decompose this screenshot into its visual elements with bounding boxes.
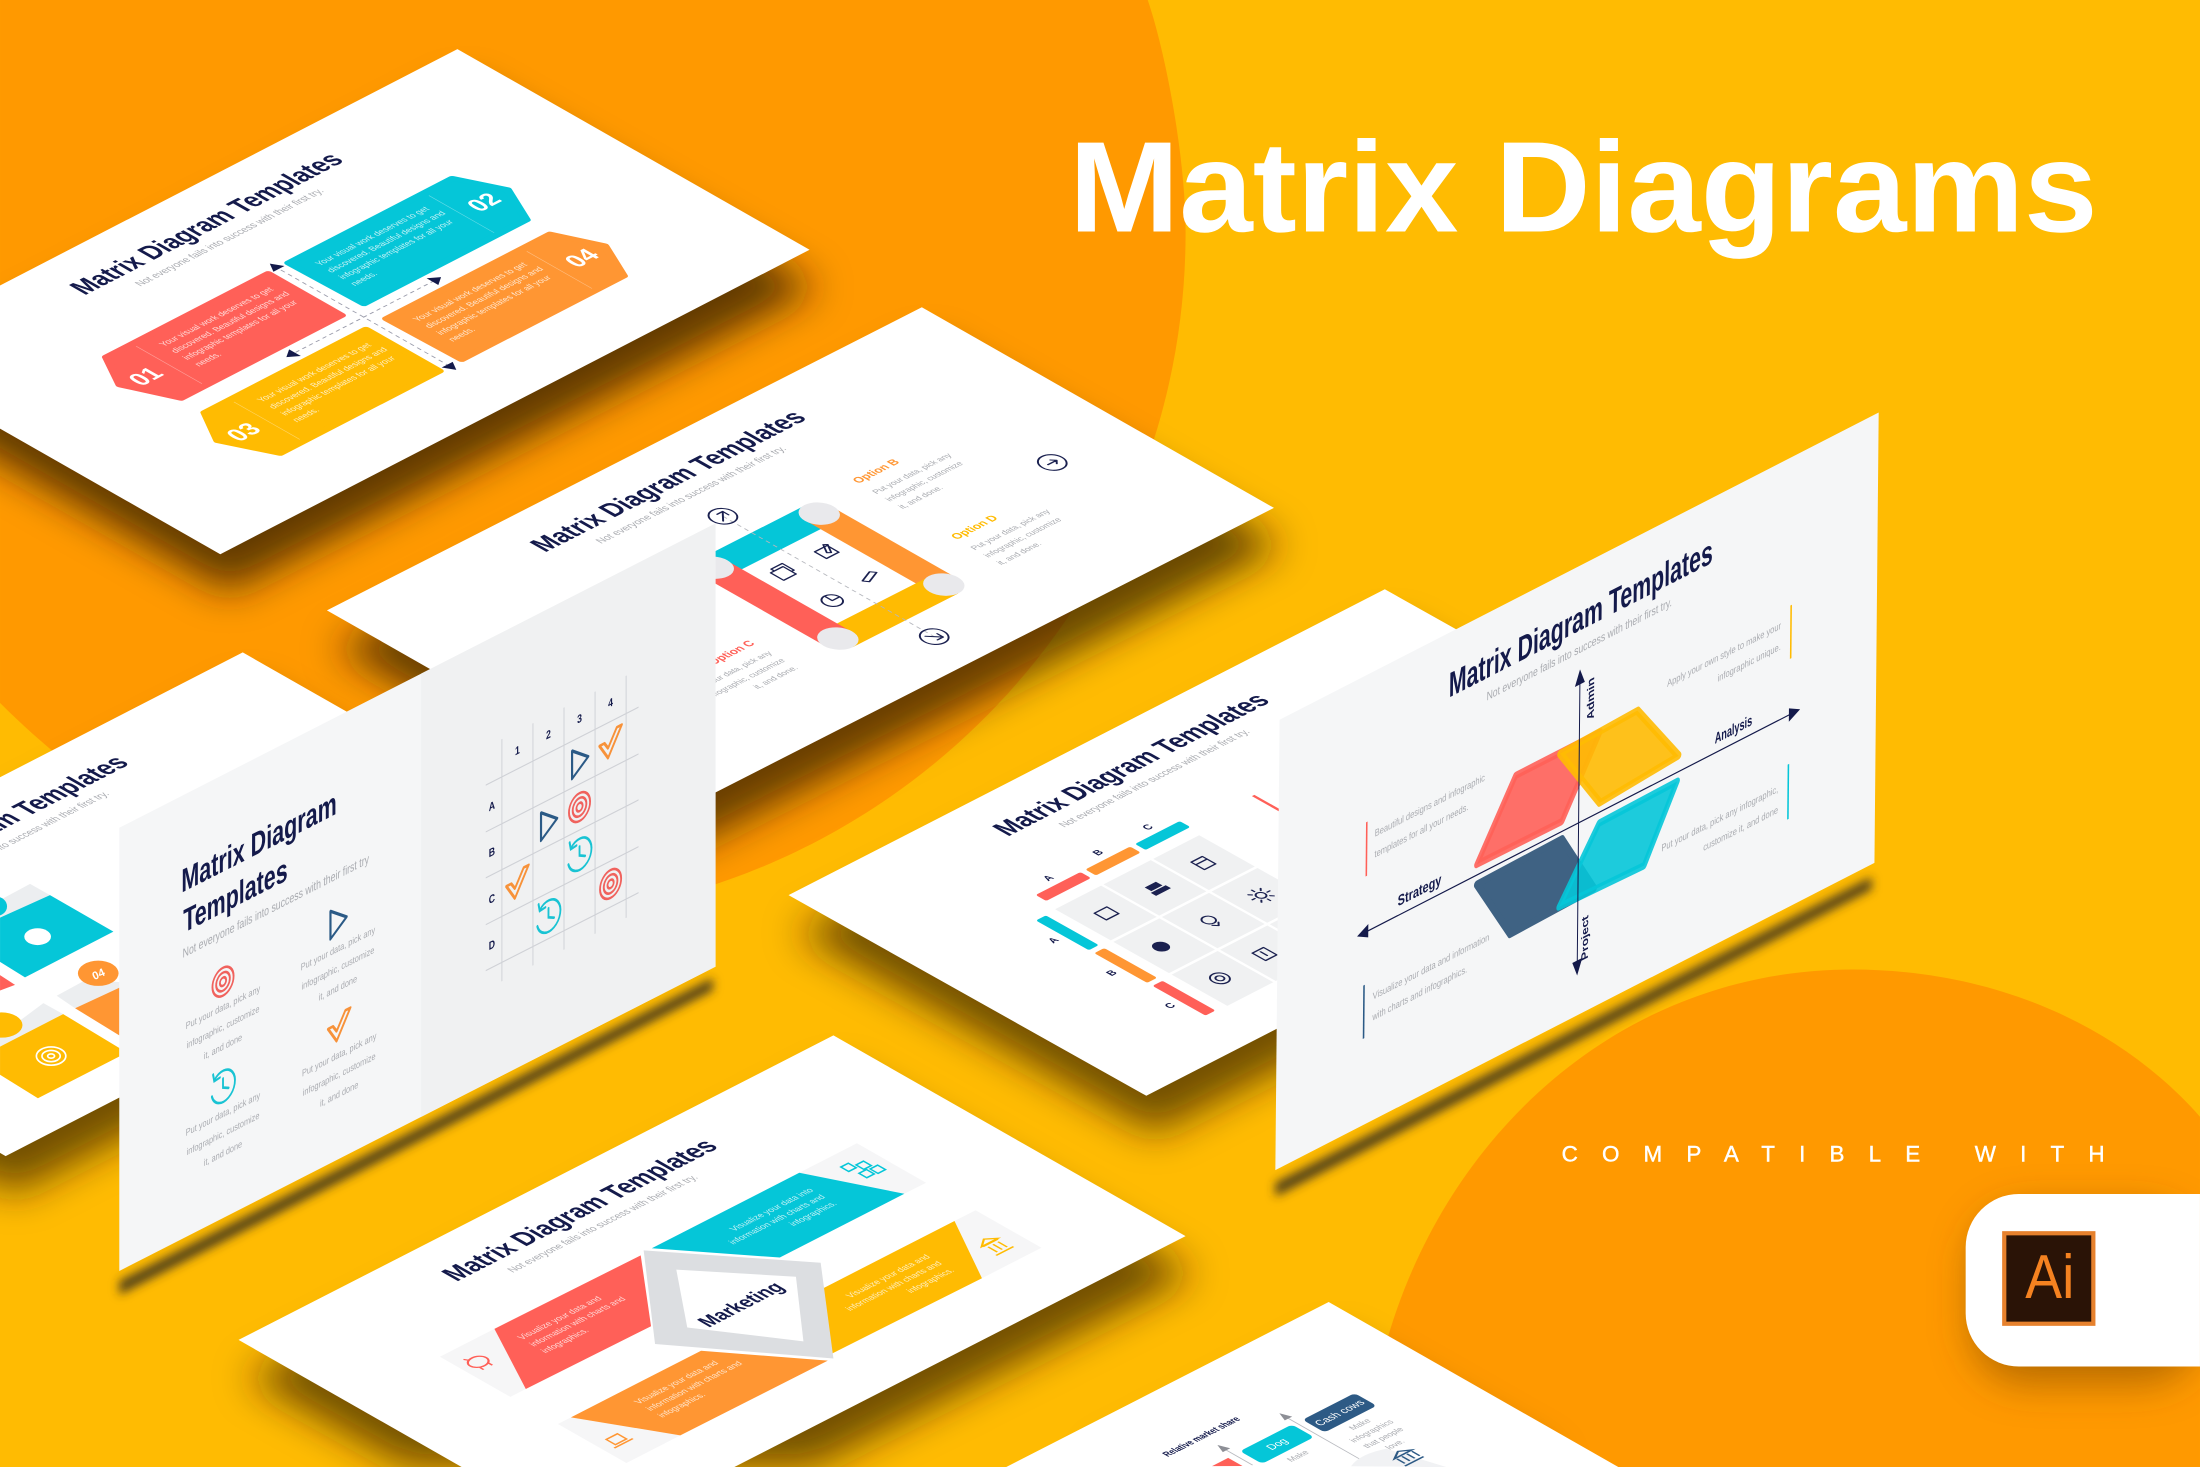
slide: numbered tags (0, 49, 810, 554)
side header bars: A (1046, 936, 1063, 945)
teal segment: infographics. (787, 1200, 839, 1227)
cell with bank icon (1348, 1439, 1447, 1467)
tag 03: needs. (290, 406, 322, 424)
side note marker (1253, 796, 1290, 816)
feature: triangle: it, and done (319, 973, 357, 1003)
background circle: top left (0, 0, 1186, 919)
panel shadow: left panel (119, 978, 713, 1295)
teal segment: information with charts and (726, 1193, 828, 1246)
red segment: infographics. (538, 1327, 591, 1354)
teal segment: Visualize your data into (727, 1187, 816, 1232)
slide shadow: marketing (247, 1073, 1194, 1467)
quadrant: teal (1559, 781, 1677, 909)
note: top left: Beautiful designs and infographic (1375, 772, 1485, 839)
arrow badges (703, 391, 1178, 648)
left slide quadrants: 04 (91, 966, 108, 983)
note: lower right: Put your data, pick any infographic, (1661, 783, 1778, 854)
tag 01: Your visual work deserves to get (157, 286, 276, 348)
feature: triangle: Put your data, pick any (301, 924, 376, 973)
grid cells (1055, 835, 1371, 1006)
grid matrix (486, 669, 639, 990)
tag 04: needs. (446, 326, 478, 343)
axis label: Relative market share (1161, 1415, 1244, 1459)
panel title: Matrix Diagram Templates (1449, 531, 1713, 705)
panel shadow: right panel (1275, 877, 1872, 1197)
note: top left (1366, 761, 1485, 876)
tag 01 (88, 274, 342, 408)
tag 02: 02 (461, 190, 508, 216)
yellow segment (766, 1210, 1041, 1355)
badge: Cash cows (1303, 1393, 1377, 1432)
text: Cash cows: Make (1346, 1417, 1373, 1431)
panel title: Templates (183, 851, 288, 941)
option B: Option B (850, 458, 903, 485)
quadrant: yellow (1559, 689, 1679, 824)
option B (850, 440, 981, 510)
panel: standing grid (119, 523, 716, 1271)
top header bars: A (1041, 874, 1058, 883)
side header bars (1023, 915, 1215, 1022)
option C: Put your data, pick any (690, 649, 775, 693)
slide: left partial (0, 652, 595, 1156)
option D: infographic, customize (981, 516, 1064, 559)
slide shadow: ring (335, 345, 1282, 849)
option B: infographic, customize (883, 460, 966, 503)
tag 04: Your visual work deserves to get (410, 261, 530, 323)
top header bars: B (1091, 849, 1107, 857)
title: Matrix Diagrams (1069, 115, 2098, 259)
tag 03: infographic templates for all your (278, 354, 398, 417)
badge shadow (1971, 1209, 2200, 1383)
slide shadow: growth share (1089, 1340, 1560, 1467)
badge: red (1212, 1458, 1243, 1467)
option D: it, and done. (994, 540, 1044, 566)
text: Cash cows (1335, 1411, 1420, 1457)
tag 01: discovered. Beautiful designs and (168, 290, 292, 354)
orange segment: information with charts and (643, 1360, 745, 1412)
option C: Option C (706, 639, 759, 667)
slide title: Matrix Diagram Templates (523, 406, 813, 556)
tag 01: needs. (192, 351, 224, 368)
grid matrix: 4 (608, 696, 613, 711)
slide title: Matrix Diagram Templates (62, 148, 350, 299)
text: Dog: Make (1284, 1449, 1312, 1463)
axes (1356, 556, 1802, 1089)
orange segment: infographics. (655, 1391, 708, 1419)
red segment: information with charts and (527, 1295, 628, 1348)
panel title: Matrix Diagram (181, 785, 337, 900)
feature: clock (186, 1050, 261, 1178)
note: lower left: Visualize your data and information (1373, 931, 1489, 1002)
text: Cash cows: love. (1383, 1438, 1407, 1451)
option B: Put your data, pick any (870, 451, 955, 495)
tag 03: 03 (220, 419, 268, 445)
grid icons (1091, 855, 1335, 986)
option C: infographic, customize (704, 657, 788, 700)
dashed cross arrows (192, 224, 534, 410)
slide subtitle: Not everyone fails into success with their first try. (133, 187, 327, 288)
tag 01: 01 (123, 364, 170, 390)
axis labels: Admin (1585, 675, 1597, 723)
yellow segment: Visualize your data and (843, 1253, 933, 1299)
note: top left: templates for all your needs. (1375, 801, 1469, 860)
icon: Ai logo (2004, 1233, 2093, 1324)
feature: check: Put your data, pick any (302, 1030, 377, 1079)
tag 04: 04 (559, 245, 607, 271)
red segment: Visualize your data and (515, 1295, 604, 1341)
option D: Option D (949, 514, 1001, 541)
grid matrix: 1 (515, 743, 520, 759)
text: Cash cows: that people (1360, 1426, 1406, 1450)
tag 04 (387, 225, 641, 360)
arrows (1214, 1411, 1374, 1467)
grid matrix: D (489, 937, 495, 953)
slide shadow: diagram 01-04 (0, 87, 818, 592)
feature: check: infographic, customize (303, 1050, 376, 1098)
icon: Ai logo: Ai (2025, 1243, 2074, 1312)
teal segment (652, 1143, 926, 1288)
tag 03 (186, 329, 439, 464)
feature: target (186, 949, 261, 1071)
top header bars: C (1140, 823, 1157, 832)
quadrant: navy (1476, 822, 1595, 952)
badge: Adobe Illustrator (1966, 1194, 2200, 1367)
option C (672, 639, 801, 708)
feature: clock: Put your data, pick any (186, 1089, 261, 1138)
feature: triangle: infographic, customize (302, 944, 374, 992)
tag 02: Your visual work deserves to get (313, 205, 432, 267)
top header bars (1022, 813, 1190, 901)
panel: standing quadrant chart (1275, 413, 1879, 1170)
panel title (181, 785, 337, 942)
feature: target: infographic, customize (187, 1003, 259, 1051)
center frame (563, 1208, 915, 1400)
text: Cash cows: infographics (1347, 1418, 1397, 1444)
note: top right: infographic unique. (1718, 641, 1781, 684)
feature: target: it, and done (204, 1031, 242, 1062)
slide subtitle: Not everyone fails into success with their first try. (594, 445, 790, 545)
note: top right: Apply your own style to make your (1667, 620, 1781, 689)
feature: check: it, and done (320, 1079, 358, 1109)
option D (949, 497, 1079, 566)
yellow segment: infographics. (904, 1267, 957, 1294)
feature: clock: infographic, customize (187, 1110, 259, 1158)
badge: Cash cows: Cash cows (1312, 1398, 1369, 1428)
orange segment (558, 1321, 828, 1463)
slide: options ring (327, 307, 1274, 811)
background circle: bottom right (1365, 969, 2200, 1467)
ring diagram (656, 482, 1002, 671)
badge: Dog (1240, 1424, 1314, 1464)
red segment (440, 1255, 711, 1398)
slide subtitle: Not everyone fails into success with their first try. (1056, 728, 1253, 829)
slide: growth share matrix (1006, 1302, 1618, 1467)
panel subtitle: Not everyone fails into success with their first try (183, 851, 369, 961)
left slide quadrants (0, 884, 119, 1098)
tag 03: Your visual work deserves to get (255, 341, 374, 403)
feature: target: Put your data, pick any (186, 983, 261, 1032)
option D: Put your data, pick any (968, 507, 1053, 551)
slide: marketing (239, 1035, 1186, 1467)
slide title: Matrix Diagram Templates (434, 1135, 725, 1285)
tag 02: discovered. Beautiful designs and (324, 210, 448, 274)
grid matrix: A (489, 798, 495, 815)
grid matrix: C (489, 891, 495, 907)
badge: Dog: Dog (1264, 1437, 1291, 1452)
grid matrix: 3 (577, 712, 582, 727)
axis labels: Analysis (1715, 711, 1752, 747)
feature: triangle (301, 888, 376, 1012)
tag 02: infographic templates for all your (336, 218, 456, 281)
note: top right (1667, 605, 1791, 722)
axis labels (1396, 595, 1754, 1057)
tag 02 (289, 169, 544, 305)
side header bars: C (1163, 1001, 1179, 1011)
note: lower right: customize it, and done (1703, 804, 1778, 853)
center label: Marketing (629, 1241, 859, 1366)
slide: cell matrix (789, 589, 1743, 1096)
axis labels: Strategy (1398, 870, 1442, 910)
note: lower left (1364, 921, 1489, 1039)
note: lower left: with charts and infographics. (1372, 963, 1467, 1023)
compatible with label: COMPATIBLE WITH (1562, 1142, 2105, 1167)
panel subtitle: Not everyone fails into success with their first try. (1487, 596, 1672, 704)
slide shadow: left slide (0, 690, 603, 1194)
option B: it, and done. (896, 484, 945, 510)
orange segment: Visualize your data and (632, 1359, 721, 1405)
center label: Marketing: Marketing (693, 1279, 790, 1330)
option C: it, and done. (751, 664, 800, 690)
tag 01: infographic templates for all your (180, 299, 300, 361)
feature: clock: it, and done (204, 1138, 242, 1168)
side header bars: B (1104, 969, 1121, 978)
slide shadow: cell matrix (797, 629, 1747, 1134)
slide title: Matrix Diagram Templates (985, 689, 1277, 840)
feature: check (302, 994, 377, 1118)
yellow segment: information with charts and (843, 1260, 944, 1312)
tag 03: discovered. Beautiful designs and (266, 346, 390, 410)
tag 04: infographic templates for all your (434, 274, 554, 336)
note: lower right (1661, 764, 1788, 884)
grid matrix: B (489, 844, 495, 861)
tag 02: needs. (348, 270, 380, 287)
tag 04: discovered. Beautiful designs and (422, 265, 546, 330)
grid matrix: 2 (546, 727, 551, 743)
axis labels: Project (1579, 913, 1591, 963)
quadrant: red (1477, 732, 1600, 865)
slide subtitle: Not everyone fails into success with their first try. (506, 1174, 701, 1274)
